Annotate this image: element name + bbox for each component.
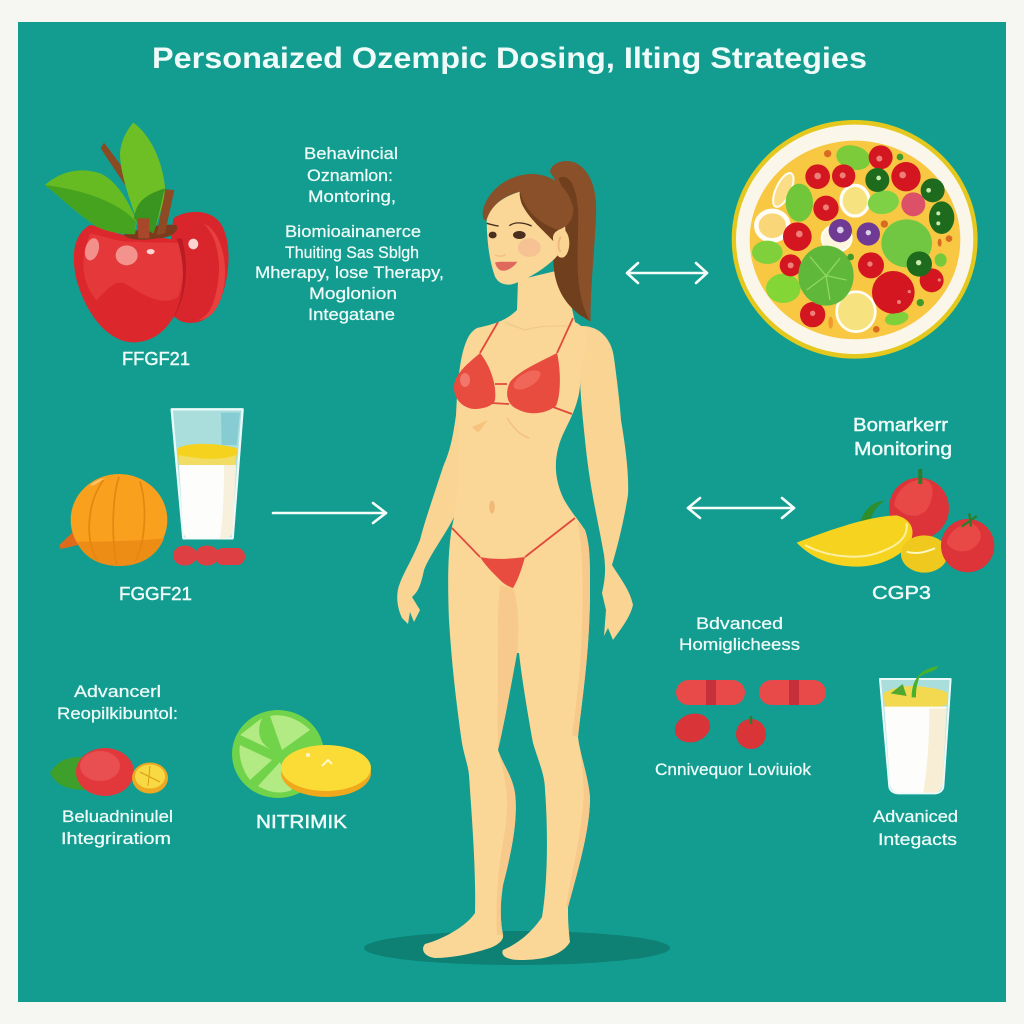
icon: lime and yellow tablet: [232, 710, 371, 798]
text block: advanced: [57, 682, 178, 723]
torso and legs: [423, 270, 590, 960]
left arm: [397, 330, 485, 624]
text block: advanced homiglicheess: [679, 614, 800, 654]
label: behavior outlook: Cnnivequor Loviuiok: [655, 760, 811, 779]
label: FGGF21: FGGF21: [119, 584, 192, 604]
text block: advanced: Advancerl: [74, 682, 161, 701]
text block: advanced homiglicheess: Bdvanced: [696, 614, 783, 633]
ponytail: [550, 161, 596, 322]
arrow: body to plate: [627, 263, 707, 283]
text block: advanced integacts: [873, 807, 958, 849]
text block: biomarker monitoring: [853, 415, 952, 459]
icon: red pills: [173, 546, 245, 566]
text block: biomarker therapy: Biomioainanerce: [285, 222, 421, 241]
ear: [554, 229, 569, 258]
bikini top: [454, 353, 560, 413]
icon: glass of milk with lemon: [172, 409, 243, 538]
text block: behavioral monitoring: Behavincial: [304, 144, 398, 163]
icon: orange fruit: [59, 474, 167, 566]
text block: biomarker monitoring: Bomarkerr: [853, 415, 948, 435]
text block: behavioral monitoring: Oznamlon:: [307, 166, 393, 185]
icon: capsules and small tomatoes: [671, 680, 826, 749]
text block: behavioral integration: [61, 807, 173, 848]
text block: biomarker therapy: Moglonion: [309, 284, 397, 303]
head: [483, 161, 596, 322]
title: Personaized Ozempic Dosing, Ilting Strategies: [152, 42, 867, 75]
icon: lemon wedge, apple and tomato: [797, 469, 994, 573]
figure: woman standing: [364, 161, 670, 965]
label: CGP3: CGP3: [872, 583, 931, 603]
text block: biomarker therapy: Integatane: [308, 305, 395, 324]
text block: biomarker therapy: Mherapy, lose Therapy,: [255, 263, 444, 282]
text block: biomarker therapy: Thuiting Sas Sblgh: [285, 243, 419, 262]
text block: advanced integacts: Integacts: [878, 830, 957, 849]
eyes: [489, 232, 497, 238]
face: [487, 192, 567, 285]
icon: apple and citrus: [50, 748, 168, 796]
text block: advanced integacts: Advaniced: [873, 807, 958, 826]
lips: [495, 262, 517, 271]
arrow: foods to body: [273, 503, 386, 523]
blush: [518, 238, 541, 257]
hair: [483, 174, 573, 241]
text block: behavioral integration: Ihtegriratiom: [61, 829, 171, 848]
label: FFGF21: FFGF21: [122, 349, 190, 369]
inner thigh shade: [498, 585, 518, 750]
icon: food plate: [732, 120, 978, 359]
text block: behavioral monitoring: Montoring,: [308, 187, 396, 206]
floor shadow: [364, 931, 670, 965]
right arm: [579, 326, 633, 640]
bikini bottom: [480, 557, 525, 588]
icon: red apple with leaves: [45, 123, 229, 342]
icon: smoothie glass: [880, 666, 951, 793]
arrow: body to fruit: [688, 498, 794, 518]
text block: advanced homiglicheess: Homiglicheess: [679, 635, 800, 654]
text block: biomarker therapy: [255, 222, 444, 324]
label: NITRIMIK: NITRIMIK: [256, 812, 347, 832]
text block: biomarker monitoring: Monitoring: [854, 439, 952, 459]
text block: advanced: Reopilkibuntol:: [57, 704, 178, 723]
text block: behavioral integration: Beluadninulel: [62, 807, 173, 826]
text block: behavioral monitoring: [304, 144, 398, 206]
